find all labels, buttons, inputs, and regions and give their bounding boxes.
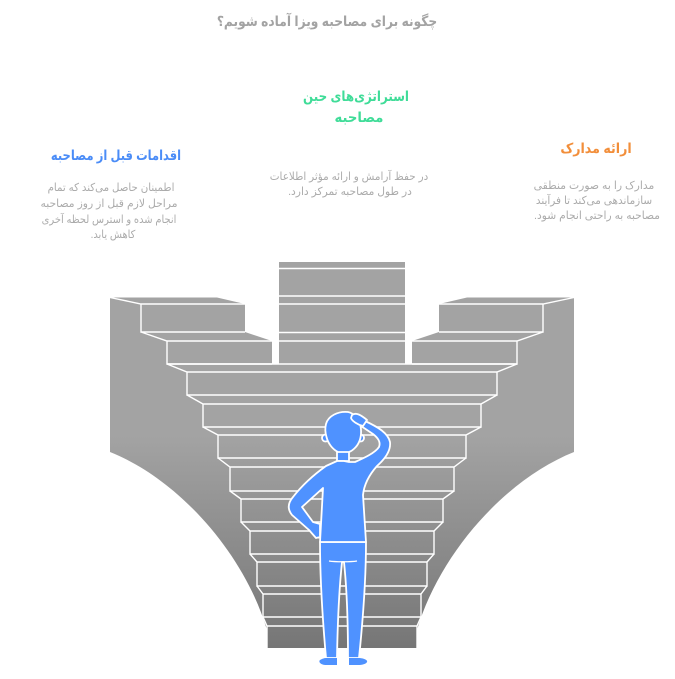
heading: interview strategies: استراتژی‌های حین	[303, 88, 408, 104]
person	[289, 412, 390, 665]
panel: pre-interview steps	[40, 147, 181, 241]
legs	[320, 542, 366, 658]
text: document presentation: مصاحبه به راحتی انجام شود.	[534, 210, 659, 222]
torso and arms	[289, 421, 390, 542]
heading: pre-interview steps: اقدامات قبل از مصاحبه	[51, 147, 181, 163]
panel: document presentation	[534, 140, 660, 222]
raised hand	[351, 414, 367, 426]
head	[325, 412, 361, 452]
text: interview strategies: در حفظ آرامش و ارائه مؤثر اطلاعات	[270, 171, 428, 183]
heading: interview strategies	[303, 88, 408, 125]
right foot	[349, 658, 367, 665]
neck	[337, 445, 349, 461]
heading: document presentation: ارائه مدارک	[560, 140, 632, 156]
text: interview strategies	[270, 170, 428, 198]
text: pre-interview steps: مراحل لازم قبل از روز مصاحبه	[40, 198, 178, 210]
text: interview strategies: در طول مصاحبه تمرکز دارد.	[288, 186, 412, 198]
title: چگونه برای مصاحبه ویزا آماده شویم؟	[217, 13, 437, 29]
staircase	[110, 262, 574, 648]
right ear	[357, 434, 364, 442]
crotch fold	[329, 560, 357, 563]
left foot	[319, 658, 337, 665]
left stair body	[110, 298, 574, 648]
text: document presentation: سازماندهی می‌کند تا فرآیند	[536, 195, 652, 207]
heading: interview strategies: مصاحبه	[334, 109, 383, 125]
text: pre-interview steps: کاهش یابد.	[90, 229, 135, 241]
text: document presentation: مدارک را به صورت منطقی	[534, 180, 654, 192]
text: document presentation	[534, 180, 660, 222]
white step lines	[110, 268, 574, 648]
text: pre-interview steps: اطمینان حاصل می‌کند که تمام	[47, 182, 174, 194]
left ear	[322, 434, 329, 442]
text: pre-interview steps	[40, 182, 178, 241]
center tower	[279, 262, 405, 364]
panel: interview strategies	[270, 88, 428, 198]
text: pre-interview steps: انجام شده و استرس لحظه آخری	[42, 214, 176, 226]
